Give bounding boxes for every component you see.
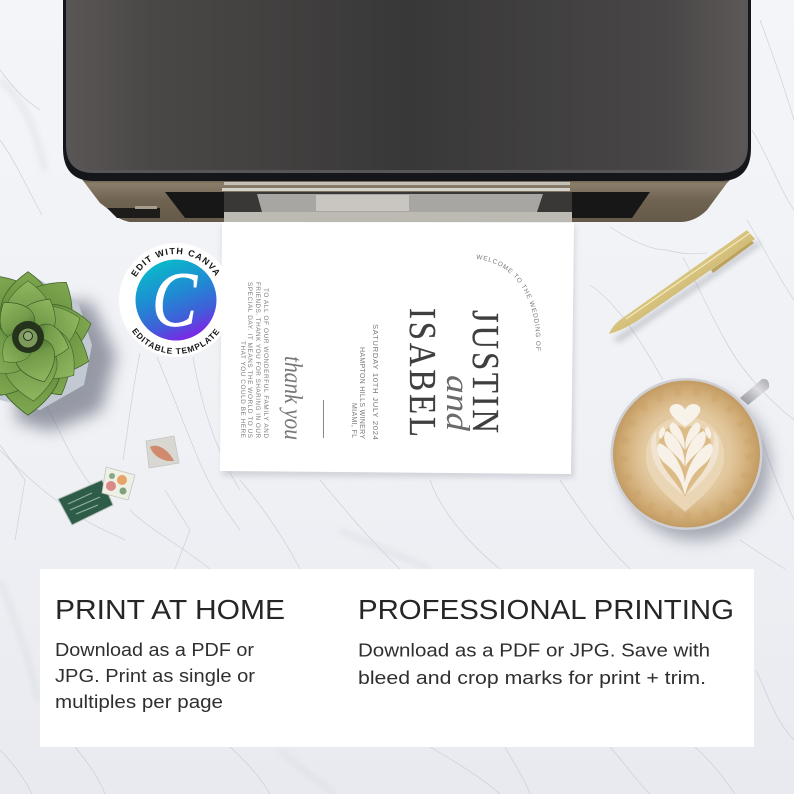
postage stamps xyxy=(58,436,179,525)
location: MIAMI, FL xyxy=(350,403,357,438)
panel: printing options xyxy=(40,569,754,747)
printer body xyxy=(78,174,736,222)
printer keypad button xyxy=(135,206,157,209)
description: print at home: JPG. Print as single or xyxy=(55,666,255,686)
printer centre recess xyxy=(224,192,572,218)
thank you message: THAT YOU COULD BE HERE xyxy=(239,341,246,438)
printer paper exit xyxy=(224,212,572,222)
plant center xyxy=(12,321,44,353)
inner petals xyxy=(0,290,73,389)
Canva letter: C xyxy=(152,256,198,343)
plant core xyxy=(18,328,38,348)
printer slot strip lower xyxy=(222,188,570,191)
venue: HAMPTON HILLS WINERY xyxy=(358,347,365,439)
latte leaves left xyxy=(651,422,685,495)
middle petals xyxy=(0,281,90,403)
printer slot strip top xyxy=(224,182,570,185)
thank you message: SPECIAL DAY. IT MEANS THE WORLD TO US xyxy=(246,282,253,438)
badge top text: EDIT WITH CANVA xyxy=(131,248,220,277)
stamp: shell xyxy=(146,436,179,468)
printer screen xyxy=(257,194,543,212)
description: print at home: multiples per page xyxy=(55,692,223,712)
plant pot xyxy=(0,273,92,410)
printer front tray xyxy=(165,192,650,218)
pen barrel xyxy=(609,230,755,334)
description: professional printing: bleed and crop marks for print + trim. xyxy=(358,668,706,688)
printer lid xyxy=(63,0,751,181)
coffee foam ring xyxy=(624,391,750,517)
icon: latte cup xyxy=(610,378,770,540)
pen highlight xyxy=(626,233,750,319)
thank you message: FRIENDS. THANK YOU FOR SHARING IN OUR xyxy=(254,282,261,438)
latte art xyxy=(646,404,724,512)
script: thank you: thank you xyxy=(279,356,306,440)
script: and: and xyxy=(439,375,475,432)
latte caramel base xyxy=(658,426,712,497)
badge bottom text: EDITABLE TEMPLATE xyxy=(132,328,220,354)
heading: print at home: PRINT AT HOME xyxy=(55,594,285,625)
card paper xyxy=(220,222,574,474)
arched welcome text: WELCOME TO THE WEDDING OF xyxy=(476,254,541,350)
icon: gold pen xyxy=(609,230,760,342)
heading: professional printing: PROFESSIONAL PRINTING xyxy=(358,594,734,625)
outer petals xyxy=(0,265,99,415)
description: print at home: Download as a PDF or xyxy=(55,640,254,660)
badge: edit with Canva xyxy=(119,243,222,357)
icon: succulent plant xyxy=(0,265,116,431)
latte heart xyxy=(670,404,700,427)
column: print at home xyxy=(55,594,285,712)
thank you message: TO ALL OF OUR WONDERFUL FAMILY AND xyxy=(262,288,269,438)
printer control keypad xyxy=(107,208,160,218)
stamp: flowers xyxy=(102,467,135,500)
description: professional printing xyxy=(358,640,710,688)
printer lid edge line xyxy=(66,0,748,173)
description: print at home xyxy=(55,640,255,712)
latte swirl xyxy=(646,418,724,512)
printer screen highlight xyxy=(316,195,409,211)
name: Justin: JUSTIN xyxy=(464,310,507,433)
invitation card xyxy=(220,222,576,480)
coffee surface xyxy=(613,380,760,528)
cup rim xyxy=(610,378,762,530)
printer lid panel xyxy=(68,0,746,170)
column: professional printing xyxy=(358,594,734,688)
date: SATURDAY 10TH JULY 2024 xyxy=(371,324,380,440)
description: professional printing: Download as a PDF or JPG. Save with xyxy=(358,640,710,660)
icon: printer xyxy=(63,0,751,222)
pen clip xyxy=(711,241,754,273)
stamp: green xyxy=(58,480,113,525)
cup handle xyxy=(740,379,769,405)
Canva gradient circle xyxy=(136,260,216,340)
latte leaves right xyxy=(685,422,719,495)
name: Isabel: ISABEL xyxy=(401,308,444,437)
divider line xyxy=(323,400,324,438)
thank you message xyxy=(239,282,269,438)
